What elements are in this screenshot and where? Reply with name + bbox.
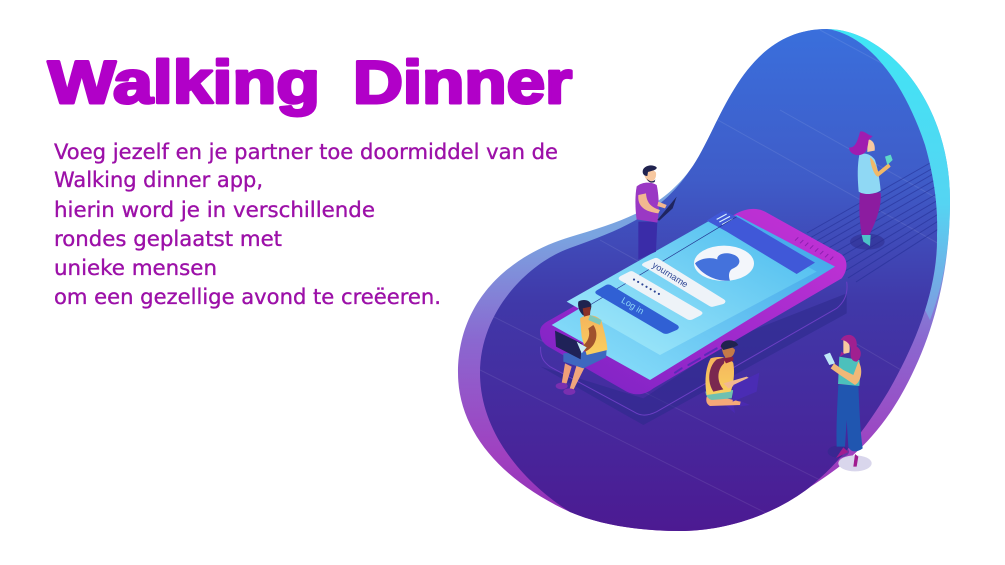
menu icon (717, 214, 733, 225)
title: Dinner (353, 49, 572, 116)
person: standing man with tablet (635, 165, 677, 259)
blob cyan right rim (827, 29, 950, 320)
description text block: rondes geplaatst met (54, 227, 282, 251)
avatar icon (694, 246, 754, 281)
description text block: om een gezellige avond te creëeren. (54, 285, 441, 309)
phone outlines underneath (541, 282, 847, 415)
username field (642, 258, 726, 307)
description text block: Walking dinner app, (54, 168, 263, 192)
phone scene (540, 165, 847, 425)
app header (707, 211, 815, 274)
blob outer edge (458, 29, 950, 531)
person: woman at back with phone (849, 131, 893, 250)
screen divider line (590, 217, 737, 305)
log in button: Log in (620, 295, 646, 316)
phone speaker ribs (795, 237, 833, 260)
person: woman in front with phone (824, 335, 872, 471)
username field: yourname (651, 260, 690, 290)
log in button (595, 284, 679, 334)
phone shadow (541, 293, 847, 425)
person: sitting on phone with laptop (555, 300, 607, 395)
title (48, 49, 572, 116)
phone body (540, 209, 846, 394)
blob floor (480, 29, 937, 531)
password field: ••••••• (629, 275, 663, 300)
description text block: hierin word je in verschillende (54, 198, 375, 222)
title: Walking (48, 49, 320, 116)
description text block: Voeg jezelf en je partner toe doormiddel van de (54, 140, 558, 164)
password field (619, 271, 703, 320)
description text block (54, 140, 558, 309)
phone screen (552, 215, 835, 380)
description text block: unieke mensen (54, 256, 217, 280)
phone side buttons (675, 348, 717, 373)
infographic canvas (46, 29, 950, 531)
app panel (567, 217, 817, 355)
blob platform (458, 29, 950, 531)
person: sitting on floor with laptop (705, 340, 759, 413)
